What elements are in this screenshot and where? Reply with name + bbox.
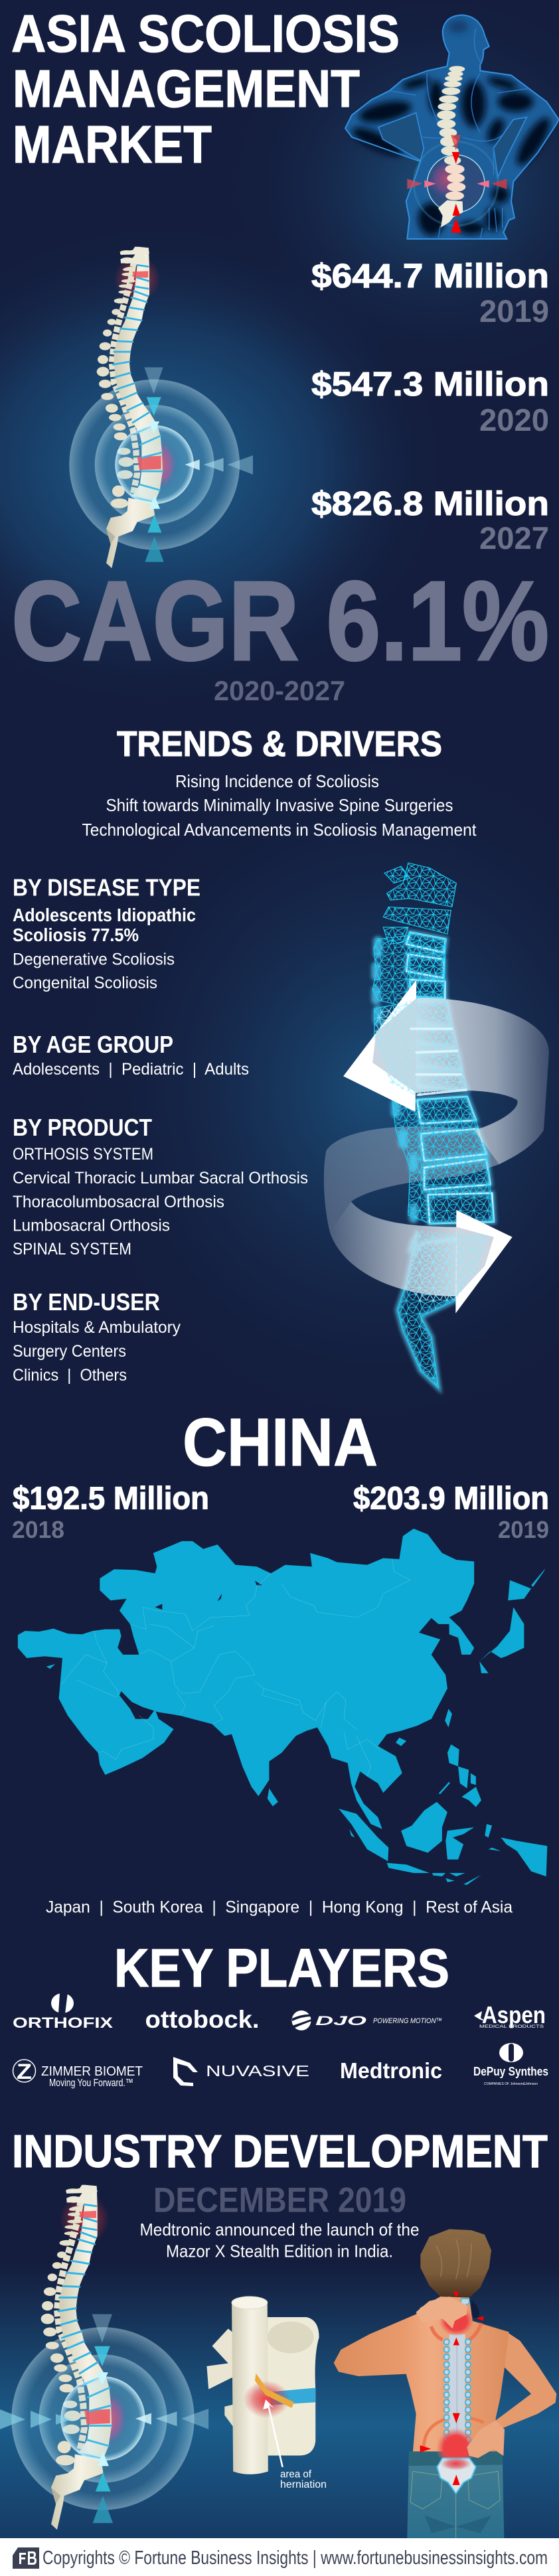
logo: Orthofix	[13, 1993, 113, 2031]
stat: 2019	[311, 257, 549, 329]
segment: by disease type: Congenital Scoliosis	[13, 974, 157, 992]
segment: by age group: BY AGE GROUP	[13, 1031, 173, 1058]
stat: 2020: $547.3 Million	[311, 365, 549, 403]
logo: Zimmer Biomet: Z	[17, 2060, 32, 2084]
illustration: human back with spine	[345, 15, 559, 239]
logo: Aspen: Aspen	[482, 2001, 546, 2028]
map of Asia	[18, 1529, 547, 1885]
title: ASIA SCOLIOSIS	[11, 4, 400, 63]
title: MANAGEMENT	[13, 59, 360, 118]
segment: by disease type: Degenerative Scoliosis	[13, 950, 175, 969]
logo: Zimmer Biomet: Moving You Forward.™	[49, 2078, 133, 2089]
segment: by end-user	[13, 1288, 181, 1385]
segment: by product: SPINAL SYSTEM	[13, 1240, 131, 1258]
stat: 2019: $644.7 Million	[311, 257, 549, 295]
segment: by disease type: Scoliosis 77.5%	[13, 925, 139, 945]
herniation label	[280, 2469, 327, 2490]
logo: NuVasive: NUVASIVE	[206, 2062, 309, 2080]
China stat: 2019: 2019	[498, 1516, 549, 1543]
segment: by disease type: Adolescents Idiopathic	[13, 905, 196, 925]
logo: NuVasive	[173, 2057, 309, 2086]
stat: 2027: $826.8 Million	[311, 485, 549, 522]
segment: by age group	[13, 1031, 249, 1079]
logo: Aspen: MEDICAL PRODUCTS	[479, 2025, 544, 2029]
logo: DePuy Synthes: COMPANIES OF Johnson&Johnson	[484, 2082, 538, 2086]
date: DECEMBER 2019	[153, 2181, 406, 2220]
logo: Orthofix: ORTHOFIX	[13, 2014, 113, 2031]
segment: by end-user: Hospitals & Ambulatory	[13, 1318, 181, 1337]
development description: Medtronic announced the launch of the	[139, 2220, 420, 2239]
CAGR period: 2020-2027	[214, 675, 345, 706]
segment: by product: Lumbosacral Orthosis	[13, 1216, 170, 1235]
logo: Ottobock: ottobock.	[145, 2006, 259, 2033]
China stat: 2018: 2018	[12, 1516, 64, 1543]
trends list	[82, 771, 477, 840]
segment: by product	[13, 1114, 308, 1258]
China stat: 2018	[12, 1481, 209, 1543]
segment: by disease type	[13, 873, 200, 992]
segment: by end-user: BY END-USER	[13, 1288, 160, 1316]
other countries: Japan | South Korea | Singapore | Hong Kong | Rest of Asia	[46, 1898, 513, 1917]
segment: by product: ORTHOSIS SYSTEM	[13, 1145, 153, 1164]
segment: by disease type: BY DISEASE TYPE	[13, 873, 200, 901]
illustration: mesh spine with ribbon arrow	[324, 863, 549, 1388]
segment: by product: Thoracolumbosacral Orthosis	[13, 1193, 224, 1211]
development description: Mazor X Stealth Edition in India.	[166, 2241, 393, 2261]
illustration: spine with target rings	[69, 247, 253, 568]
China stat: 2019: $203.9 Million	[353, 1481, 549, 1516]
heading: China: CHINA	[183, 1404, 378, 1480]
segment: by product: Cervical Thoracic Lumbar Sacral Orthosis	[13, 1169, 308, 1187]
trends list: Rising Incidence of Scoliosis	[175, 771, 379, 791]
illustration: herniated disc vertebra	[206, 2297, 319, 2474]
footer bar	[0, 2538, 559, 2576]
logo: Zimmer Biomet	[13, 2060, 143, 2089]
logo: DJO: POWERING MOTION™	[373, 2017, 442, 2025]
herniation label: area of	[280, 2469, 312, 2480]
illustration: spine with target rings, lower	[0, 2185, 208, 2530]
trends list: Shift towards Minimally Invasive Spine Surgeries	[106, 795, 453, 815]
trends list: Technological Advancements in Scoliosis Management	[82, 820, 477, 840]
logo: Zimmer Biomet: ZIMMER BIOMET	[41, 2064, 143, 2079]
logo: Medtronic: Medtronic	[340, 2058, 442, 2083]
stat: 2020: 2020	[479, 402, 549, 437]
title: MARKET	[13, 115, 212, 174]
icon: Fortune Business Insights mark	[13, 2547, 39, 2569]
logo: DePuy Synthes: DePuy Synthes	[473, 2065, 548, 2078]
title	[11, 4, 400, 174]
stat: 2019: 2019	[479, 293, 549, 329]
logo: DePuy Synthes	[473, 2043, 548, 2086]
heading: key players: KEY PLAYERS	[114, 1938, 449, 1999]
segment: by product: BY PRODUCT	[13, 1114, 152, 1141]
stat: 2027: 2027	[479, 520, 549, 556]
stat: 2027	[311, 485, 549, 556]
herniation label: herniation	[280, 2479, 327, 2490]
logo: DJO	[292, 2010, 442, 2030]
development description	[139, 2220, 420, 2261]
China stat: 2019	[353, 1481, 549, 1543]
illustration: man holding neck and back	[334, 2229, 556, 2538]
segment: by end-user: Clinics | Others	[13, 1366, 127, 1385]
segment: by end-user: Surgery Centers	[13, 1342, 126, 1361]
stat: 2020	[311, 365, 549, 437]
segment: by age group: Adolescents | Pediatric | Adults	[13, 1060, 249, 1079]
heading: trends and drivers: TRENDS & DRIVERS	[117, 724, 442, 764]
logo: DJO: DJO	[315, 2014, 366, 2028]
China stat: 2018: $192.5 Million	[13, 1481, 209, 1516]
